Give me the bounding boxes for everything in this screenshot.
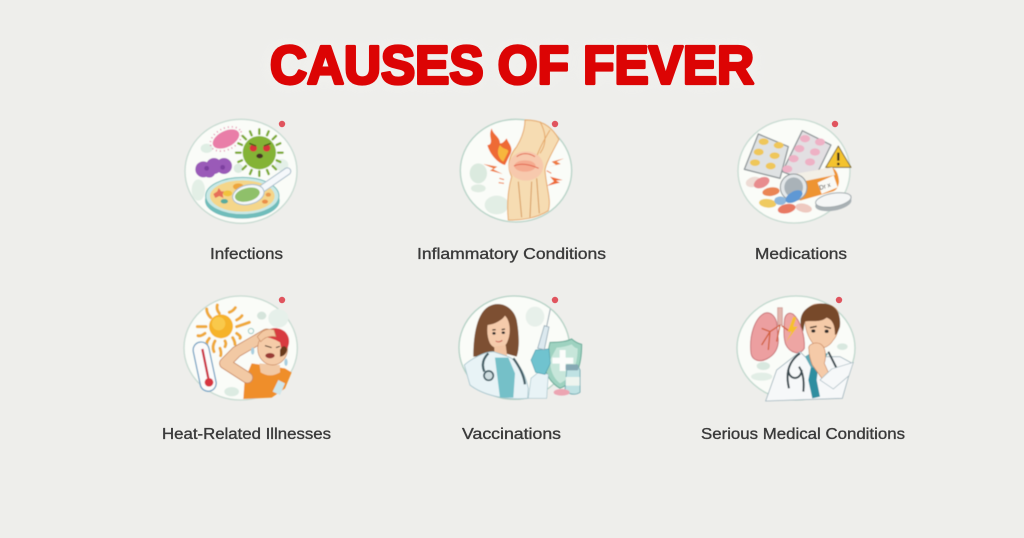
label: inflammatory conditions: Inflammatory Conditions bbox=[417, 246, 606, 263]
icon: medications: Dr x bbox=[818, 181, 832, 192]
label: vaccinations: Vaccinations bbox=[462, 426, 561, 443]
label: serious medical conditions: Serious Medical Conditions bbox=[701, 426, 905, 443]
label: infections: Infections bbox=[210, 246, 283, 263]
status dot: vaccinations bbox=[552, 297, 558, 303]
title: CAUSES OF FEVER bbox=[268, 36, 756, 96]
icon: inflammatory conditions bbox=[460, 119, 572, 222]
icon: serious medical conditions bbox=[737, 296, 855, 401]
status dot: serious medical conditions bbox=[836, 297, 842, 303]
status dot: medications bbox=[832, 121, 838, 127]
icon: heat-related illnesses bbox=[184, 296, 297, 400]
icon: vaccinations bbox=[459, 296, 582, 399]
label: medications: Medications bbox=[755, 246, 847, 263]
status dot: inflammatory conditions bbox=[552, 121, 558, 127]
title: CAUSES OF FEVER bbox=[270, 36, 754, 96]
label: heat-related illnesses: Heat-Related Illnesses bbox=[162, 426, 331, 443]
icon: medications bbox=[738, 119, 853, 223]
icon: infections bbox=[185, 119, 297, 223]
status dot: infections bbox=[279, 121, 285, 127]
status dot: heat-related illnesses bbox=[279, 297, 285, 303]
